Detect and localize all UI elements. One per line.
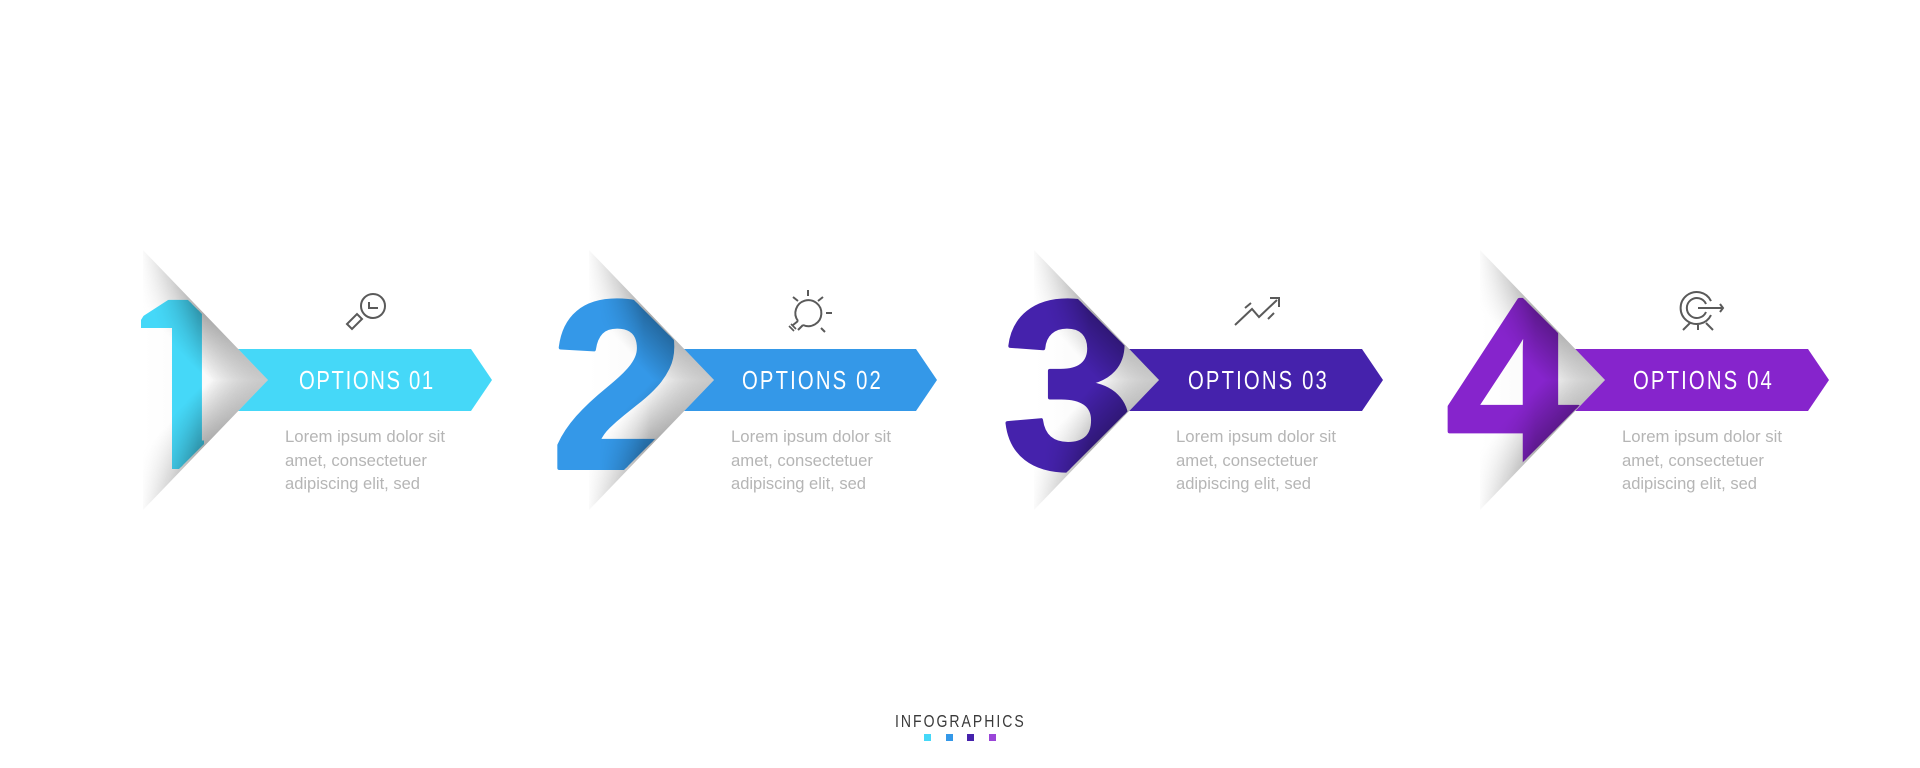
footer colour legend (924, 734, 996, 741)
arrow banner 1: OPTIONS 01 (299, 366, 433, 395)
footer title: INFOGRAPHICS (895, 711, 1024, 731)
description 3: Lorem ipsum dolor sit (1176, 427, 1336, 446)
description 4: amet, consectetuer (1622, 451, 1764, 470)
arrow banner 3: OPTIONS 03 (1188, 366, 1327, 395)
description 2: amet, consectetuer (731, 451, 873, 470)
folded triangle 1 (143, 250, 268, 510)
icon: magnifier with clock (347, 294, 385, 329)
arrow banner 4 (1565, 349, 1829, 411)
description 1 (285, 427, 445, 493)
infographic canvas (141, 253, 1829, 741)
description 4: adipiscing elit, sed (1622, 474, 1757, 493)
panel: option 3 (1002, 250, 1383, 519)
icon: light bulb (789, 290, 832, 332)
arrow banner 2: OPTIONS 02 (742, 366, 881, 395)
folded triangle 3 (1034, 250, 1159, 510)
description 3: adipiscing elit, sed (1176, 474, 1311, 493)
description 1: adipiscing elit, sed (285, 474, 420, 493)
panel: option 1 (141, 253, 492, 506)
arrow banner 2 (674, 349, 937, 411)
number 1: 1 (111, 250, 244, 518)
description 3 (1176, 427, 1336, 493)
icon: trend arrow (1235, 298, 1279, 325)
description 3: amet, consectetuer (1176, 451, 1318, 470)
panel: option 4 (1446, 248, 1829, 516)
arrow banner 4: OPTIONS 04 (1633, 366, 1772, 395)
panel: option 2 (551, 250, 937, 519)
folded triangle 2 (589, 250, 714, 510)
arrow banner 3 (1119, 349, 1383, 411)
folded triangle 4 (1480, 250, 1605, 510)
description 2: adipiscing elit, sed (731, 474, 866, 493)
description 2: Lorem ipsum dolor sit (731, 427, 891, 446)
icon: target with arrow (1681, 292, 1723, 330)
number 3: 3 (1002, 251, 1135, 519)
arrow banner 1 (228, 349, 492, 411)
description 4 (1622, 427, 1782, 493)
description 1: Lorem ipsum dolor sit (285, 427, 445, 446)
description 1: amet, consectetuer (285, 451, 427, 470)
number 4: 4 (1446, 248, 1579, 516)
number 2: 2 (551, 251, 684, 519)
description 2 (731, 427, 891, 493)
description 4: Lorem ipsum dolor sit (1622, 427, 1782, 446)
